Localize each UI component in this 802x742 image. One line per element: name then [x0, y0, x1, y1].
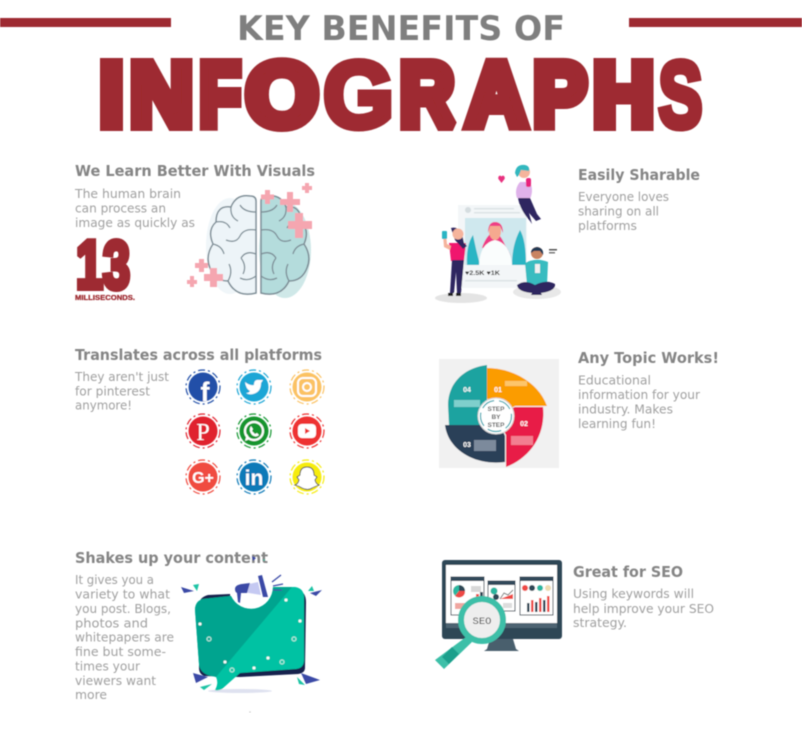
body text: variety to what	[75, 586, 170, 602]
illustration: monitor with seo magnifier	[435, 560, 562, 669]
body text: can process an	[75, 200, 166, 216]
icon: twitter	[237, 370, 271, 404]
body text: more	[75, 687, 107, 702]
center badge: STEP	[488, 406, 505, 413]
body text	[573, 586, 714, 630]
body text: platforms	[578, 218, 637, 233]
icon: google plus	[186, 460, 220, 494]
header rule left	[0, 18, 171, 27]
title: infographs: N	[130, 44, 193, 145]
panel: great for seo	[435, 560, 714, 669]
body text: fine but some-	[75, 644, 166, 659]
body text: Using keywords will	[573, 586, 694, 601]
monitor	[442, 560, 562, 651]
center badge: STEP	[488, 422, 505, 429]
segment: step 03: 03	[463, 442, 471, 449]
icon: facebook: f	[200, 377, 210, 407]
title: infographs: G	[323, 42, 394, 147]
heading: Great for SEO	[573, 563, 683, 581]
segment: step 04: 04	[463, 387, 471, 394]
icon: linkedin	[237, 460, 271, 494]
body text: The human brain	[74, 186, 181, 201]
panel: we learn better with visuals	[74, 162, 315, 303]
body text: It gives you a	[75, 572, 154, 587]
title: infographs: R	[400, 44, 454, 145]
body text: viewers want	[75, 673, 156, 688]
title: key benefits of: KEY BENEFITS OF	[237, 9, 565, 49]
heading: Any Topic Works!	[578, 349, 719, 367]
icon: google plus: G+	[192, 470, 214, 487]
icon: whatsapp	[237, 414, 271, 448]
icon: pinterest	[186, 414, 220, 448]
illustration: speech bubble with megaphone	[181, 556, 322, 713]
body text: industry. Makes	[578, 402, 673, 416]
body text	[578, 372, 701, 431]
dashboard card 2	[488, 581, 515, 611]
heading: Easily Sharable	[578, 166, 700, 184]
chart: step by step wheel	[439, 359, 559, 468]
dashboard card 3	[520, 577, 553, 615]
icon: brain	[187, 183, 312, 298]
title: infographs: S	[659, 44, 702, 148]
title: infographs: O	[246, 45, 318, 145]
woman sitting on top	[498, 165, 541, 224]
body text: photos and	[75, 616, 148, 630]
body text: image as quickly as	[75, 215, 195, 230]
body text	[74, 369, 169, 412]
body text	[75, 572, 174, 702]
icon: pinterest: P	[196, 420, 210, 446]
body text: information for your	[578, 387, 701, 402]
icon: youtube	[290, 414, 324, 448]
header rule right	[629, 18, 802, 27]
panel: translates across all platforms	[74, 346, 324, 494]
body text: times your	[75, 658, 141, 674]
woman standing left	[442, 228, 467, 296]
title: infographs: F	[199, 44, 241, 145]
body text	[578, 189, 669, 233]
panel: shakes up your content	[75, 549, 322, 713]
heading: Translates across all platforms	[75, 346, 322, 364]
segment: step 02: 02	[520, 421, 528, 428]
body text: help improve your SEO	[573, 601, 714, 616]
panel: any topic works	[439, 349, 719, 468]
body text	[74, 186, 195, 230]
icon: snapchat	[290, 460, 324, 494]
magnifier: SEO	[473, 616, 491, 628]
stat: 13 milliseconds: 13	[76, 227, 130, 303]
dashboard card 1	[451, 577, 484, 615]
segment: step 01: 01	[494, 387, 502, 394]
confetti triangles	[181, 556, 322, 713]
title: infographs	[99, 42, 702, 148]
title: infographs: I	[99, 44, 124, 145]
body text: Educational	[578, 372, 651, 388]
stat: 13 milliseconds: MILLISECONDS.	[75, 293, 135, 302]
illustration: people sharing a post: ♥2.5K ♥1K	[465, 270, 500, 277]
body text: Everyone loves	[578, 189, 669, 204]
body text: you post. Blogs,	[75, 601, 171, 616]
body text: anymore!	[75, 398, 132, 412]
title: infographs: H	[593, 44, 654, 145]
body text: for pinterest	[75, 384, 150, 398]
megaphone	[235, 575, 283, 603]
heading: Shakes up your content	[75, 549, 268, 567]
icon: linkedin: in	[245, 467, 263, 490]
panel: easily sharable	[435, 165, 700, 303]
illustration: people sharing a post	[435, 165, 561, 303]
icon: facebook	[186, 370, 220, 407]
icon: instagram	[290, 370, 324, 404]
man sitting right	[517, 247, 557, 295]
body text: sharing on all	[578, 204, 659, 218]
center badge	[478, 398, 514, 434]
body text: whitepapers are	[75, 630, 174, 644]
title: infographs: A	[466, 45, 527, 145]
heading: We Learn Better With Visuals	[75, 162, 315, 180]
body text: learning fun!	[578, 416, 656, 431]
body text: They aren't just	[74, 369, 169, 384]
title: infographs: P	[533, 45, 587, 146]
body text: strategy.	[573, 615, 627, 630]
center badge: BY	[491, 414, 501, 421]
